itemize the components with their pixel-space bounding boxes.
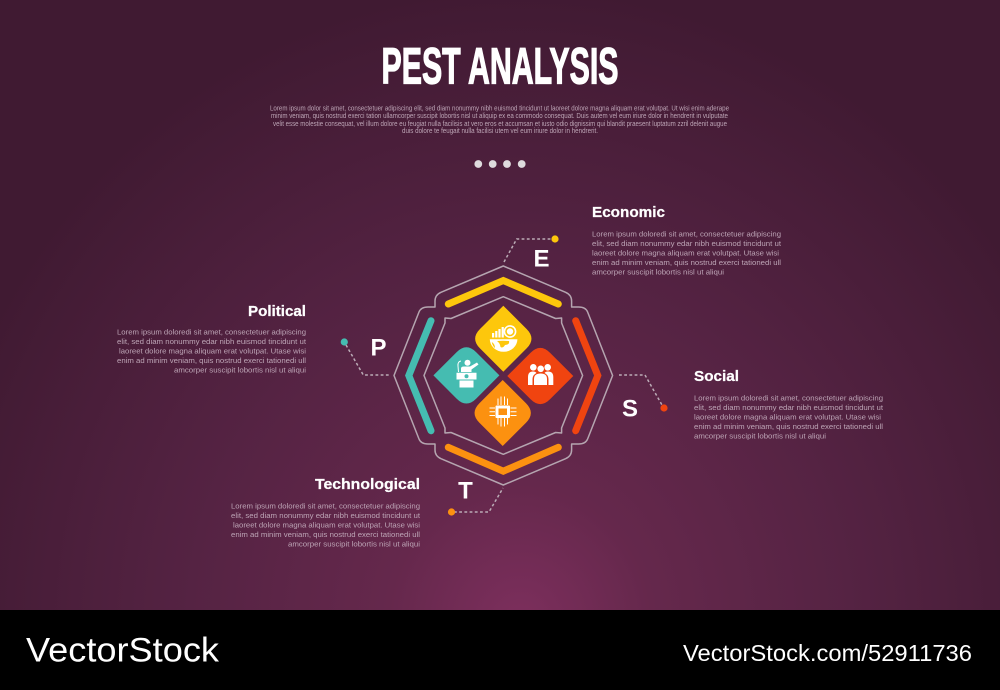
panel: economic bbox=[592, 205, 782, 276]
chevron: social bbox=[576, 321, 598, 431]
text block: political: enim ad minim veniam, quis nostrud exerci tationedi ull bbox=[117, 356, 306, 365]
pagination dots bbox=[474, 160, 526, 168]
panel: political bbox=[117, 304, 307, 374]
diamond: technological bbox=[475, 380, 531, 446]
text block: political: Lorem ipsum doloredi sit amet, consectetuer adipiscing bbox=[117, 328, 306, 336]
diamond: political bbox=[433, 347, 499, 404]
footer logo text: VectorStock bbox=[26, 632, 220, 670]
inner octagon outline bbox=[424, 297, 583, 454]
text block: economic: laoreet dolore magna aliquam erat volutpat. Utase wisi bbox=[592, 248, 779, 257]
chevron: technological bbox=[448, 447, 558, 471]
text block: technological: enim ad minim veniam, quis nostrud exerci tationedi ull bbox=[231, 530, 420, 539]
text block: technological: laoreet dolore magna aliquam erat volutpat. Utase wisi bbox=[233, 520, 420, 529]
text block: technological: Lorem ipsum doloredi sit amet, consectetuer adipiscing bbox=[231, 501, 420, 510]
diamond: economic bbox=[475, 306, 531, 372]
letter S: S bbox=[622, 396, 638, 422]
letter P: P bbox=[370, 334, 387, 362]
intro paragraph: velit esse molestie consequat, vel illum dolore eu feugiat nulla facilisis at vero eros et accumsan et iusto odio dignissim qui blandit praesent luptatum zzril delenit augue bbox=[273, 119, 727, 128]
connector: economic bbox=[504, 235, 559, 262]
text block: political: amcorper suscipit lobortis nisl ut aliqui bbox=[174, 366, 306, 374]
connector: technological bbox=[448, 488, 503, 516]
heading: social: Social bbox=[694, 369, 739, 385]
text block: social: laoreet dolore magna aliquam erat volutpat. Utase wisi bbox=[694, 412, 881, 421]
icon: globe, bars and coin bbox=[490, 325, 517, 352]
chevron: economic bbox=[448, 280, 558, 304]
text block: technological: amcorper suscipit lobortis nisl ut aliqui bbox=[288, 539, 420, 548]
text block: social bbox=[694, 393, 884, 440]
chevron: political bbox=[409, 321, 431, 431]
text block: political bbox=[117, 328, 307, 374]
connector: political bbox=[341, 338, 390, 375]
intro paragraph: minim veniam, quis nostrud exerci tation ullamcorper suscipit lobortis nisl ut aliquip ex ea commodo consequat. Duis autem vel eum iriure dolor in hendrerit in vulputate bbox=[271, 111, 728, 120]
intro paragraph bbox=[270, 104, 729, 135]
text block: economic: amcorper suscipit lobortis nisl ut aliqui bbox=[592, 267, 724, 276]
panel: social bbox=[694, 369, 884, 440]
text block: political: elit, sed diam nonummy edar nibh euismod tincidunt ut bbox=[117, 337, 307, 346]
icon: speaker at lectern bbox=[456, 360, 478, 388]
text block: economic: Lorem ipsum doloredi sit amet, consectetuer adipiscing bbox=[592, 229, 781, 238]
footer bar bbox=[0, 610, 1000, 690]
text block: social: Lorem ipsum doloredi sit amet, consectetuer adipiscing bbox=[694, 393, 883, 402]
diamond: social bbox=[507, 348, 573, 404]
connector: social bbox=[619, 375, 668, 412]
heading: economic: Economic bbox=[592, 205, 665, 221]
text block: economic bbox=[592, 229, 782, 276]
icon: microchip bbox=[490, 396, 516, 426]
heading: political: Political bbox=[248, 304, 306, 320]
outer octagon outline bbox=[394, 266, 613, 485]
text block: technological: elit, sed diam nonummy edar nibh euismod tincidunt ut bbox=[231, 511, 421, 520]
footer image id: VectorStock.com/52911736 bbox=[683, 640, 972, 666]
intro paragraph: duis dolore te feugait nulla facilisi utem vel eum iriure dolor in hendrerit. bbox=[402, 126, 598, 135]
icon: people group bbox=[528, 364, 553, 385]
heading: technological: Technological bbox=[315, 477, 420, 493]
text block: economic: elit, sed diam nonummy edar nibh euismod tincidunt ut bbox=[592, 239, 782, 248]
text block: social: elit, sed diam nonummy edar nibh euismod tincidunt ut bbox=[694, 403, 884, 412]
panel: technological bbox=[231, 477, 421, 548]
letter E: E bbox=[533, 246, 550, 272]
text block: economic: enim ad minim veniam, quis nostrud exerci tationedi ull bbox=[592, 258, 781, 267]
title: PEST ANALYSIS bbox=[382, 38, 618, 94]
intro paragraph: Lorem ipsum dolor sit amet, consectetuer adipiscing elit, sed diam nonummy nibh euismod tincidunt ut laoreet dolore magna aliquam erat volutpat. Ut wisi enim aderape bbox=[270, 104, 729, 112]
text block: political: laoreet dolore magna aliquam erat volutpat. Utase wisi bbox=[119, 346, 306, 356]
text block: social: enim ad minim veniam, quis nostrud exerci tationedi ull bbox=[694, 422, 883, 431]
text block: technological bbox=[231, 501, 421, 548]
text block: social: amcorper suscipit lobortis nisl ut aliqui bbox=[694, 431, 826, 440]
letter T: T bbox=[458, 478, 473, 504]
